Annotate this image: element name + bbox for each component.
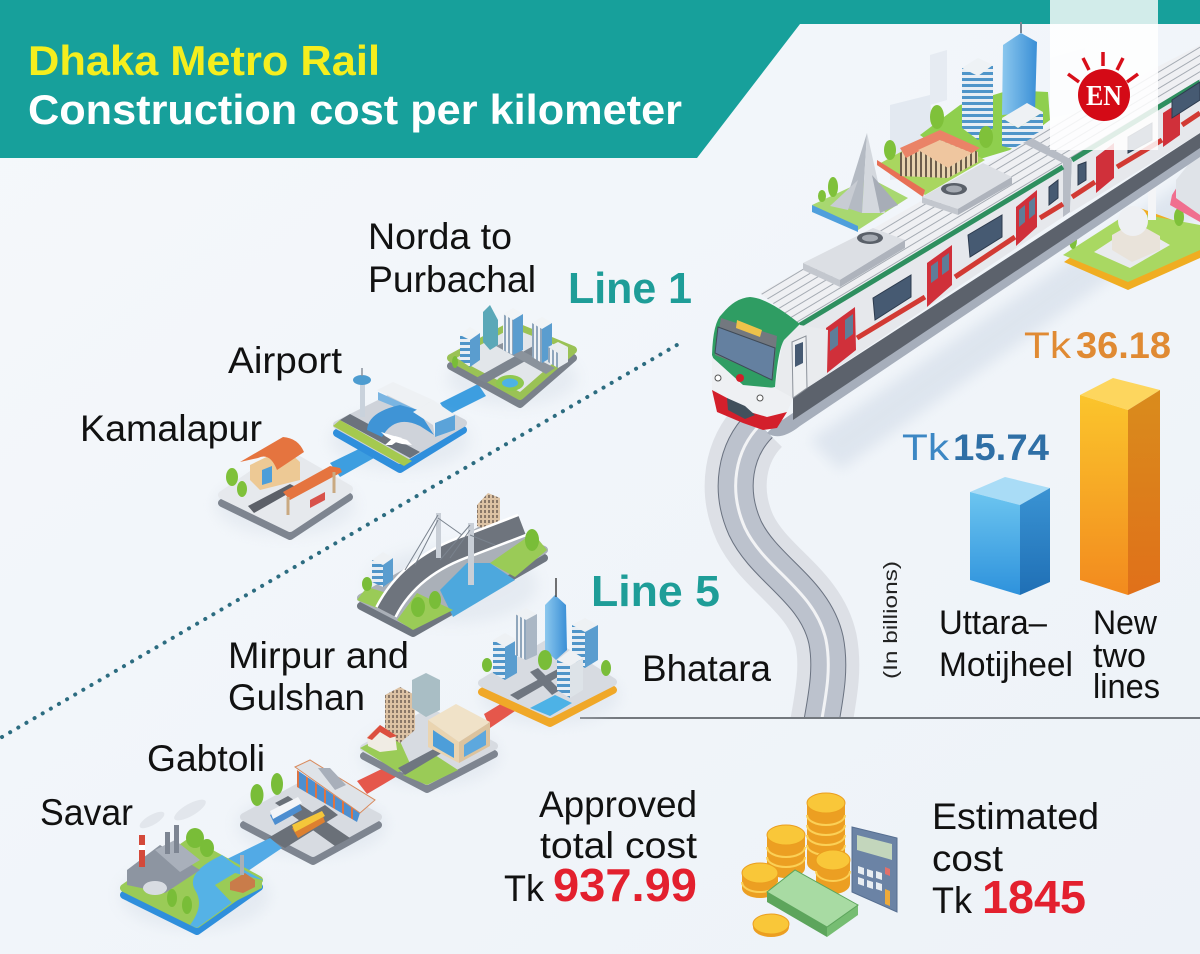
red skirt xyxy=(712,390,787,430)
smoke xyxy=(137,809,167,831)
cash stack xyxy=(767,870,858,937)
station: Kamalapur xyxy=(215,437,355,536)
right coin stack xyxy=(816,850,850,894)
logo disc xyxy=(1078,69,1130,121)
label: Mirpur and Gulshan: Mirpur and xyxy=(228,635,409,676)
middle coin stack xyxy=(767,825,805,878)
bar: New two lines xyxy=(1080,378,1160,595)
chimneys xyxy=(139,835,145,867)
icon: bridge xyxy=(357,493,547,633)
label: Norda to Purbachal xyxy=(368,216,536,300)
label: Mirpur and Gulshan: Gulshan xyxy=(228,677,365,718)
label: Mirpur and Gulshan xyxy=(228,635,409,718)
river xyxy=(190,855,263,928)
connector xyxy=(330,446,374,477)
palace tile xyxy=(877,105,993,197)
label: Savar: Savar xyxy=(40,792,133,833)
tile top xyxy=(337,392,463,460)
tan building xyxy=(477,493,500,530)
cab side window xyxy=(795,342,803,367)
white building behind logo xyxy=(1050,48,1090,118)
front white xyxy=(712,357,793,417)
axis unit: (In billions) xyxy=(881,561,902,679)
tile xyxy=(222,460,349,536)
green left bank xyxy=(357,587,387,608)
factory xyxy=(127,845,200,893)
house xyxy=(250,448,300,490)
destination sign xyxy=(736,320,762,337)
stat: approved total cost: 937.99 xyxy=(553,859,697,911)
water xyxy=(440,563,515,617)
stat: estimated cost xyxy=(932,796,1099,923)
category: Uttara–Motijheel: Motijheel xyxy=(939,646,1073,684)
tile xyxy=(364,720,494,789)
low striped block xyxy=(1002,103,1043,150)
category: New two lines: New xyxy=(1093,604,1157,642)
cab side xyxy=(775,325,828,412)
connector xyxy=(225,838,282,873)
category: New two lines xyxy=(1093,604,1160,706)
base xyxy=(361,532,544,633)
connector xyxy=(440,384,486,415)
header banner xyxy=(0,0,1200,158)
title: Construction cost per kilometer xyxy=(28,86,682,133)
stat: approved total cost: total cost xyxy=(540,825,698,866)
station: Airport xyxy=(330,368,470,477)
bar chart: cost per km xyxy=(881,325,1171,706)
stat: approved total cost xyxy=(504,784,698,911)
head emblem xyxy=(736,374,744,382)
monument tile xyxy=(812,133,908,232)
station: Mirpur and Gulshan xyxy=(357,673,500,794)
side door of cab xyxy=(792,336,807,398)
front coupler xyxy=(727,398,755,419)
house xyxy=(367,725,397,752)
value: 15.74 xyxy=(902,427,1049,468)
value: 36.18 xyxy=(1024,325,1171,366)
connector xyxy=(484,697,518,728)
cab frame xyxy=(715,318,777,378)
illustration: city landmarks behind train xyxy=(812,22,1200,290)
tile base xyxy=(337,397,463,469)
stat: approved total cost: Approved xyxy=(539,784,697,825)
calculator xyxy=(852,827,897,912)
cab green mask xyxy=(712,297,800,390)
control tower xyxy=(353,368,371,417)
soft shadow under train xyxy=(810,170,1200,470)
airplane xyxy=(381,432,412,445)
trees xyxy=(186,828,204,848)
station: Gabtoli xyxy=(237,760,387,861)
stat: estimated cost: cost xyxy=(932,838,1004,879)
station labels xyxy=(40,216,771,833)
icon: coins, cash and calculator xyxy=(742,793,897,937)
title xyxy=(28,37,682,133)
stat: estimated cost: Estimated xyxy=(932,796,1099,837)
tall coin stack xyxy=(807,793,845,873)
car 1 side xyxy=(793,163,1063,397)
connector xyxy=(357,765,399,794)
horizontal rule xyxy=(580,717,1200,719)
tanks xyxy=(143,881,167,895)
buildings xyxy=(493,633,517,647)
logo text: EN xyxy=(1086,81,1122,112)
car 2 roof xyxy=(1030,45,1200,160)
label: Gabtoli: Gabtoli xyxy=(147,738,265,779)
AC units xyxy=(803,163,1012,287)
windshield xyxy=(715,327,775,380)
category: New two lines: two xyxy=(1093,637,1146,675)
elevated rail under train xyxy=(767,140,1200,436)
dotted divider xyxy=(2,342,682,737)
store xyxy=(428,704,490,742)
stat: estimated cost: Tk xyxy=(932,880,972,921)
green stripes xyxy=(800,167,1063,325)
striped tower xyxy=(962,58,993,140)
pylons xyxy=(436,513,441,558)
mosque tile xyxy=(1063,150,1200,290)
pink temple at edge xyxy=(1170,150,1200,222)
logo rays xyxy=(1068,52,1138,82)
heading: Line 1: Line 1 xyxy=(568,264,692,313)
trees xyxy=(411,597,425,617)
value: 15.74: Tk xyxy=(902,427,950,468)
metro train xyxy=(712,45,1200,430)
towers xyxy=(385,687,415,743)
station roof xyxy=(295,760,375,813)
doors xyxy=(826,102,1180,373)
bar: Uttara–Motijheel xyxy=(970,477,1050,595)
terminal xyxy=(367,382,455,437)
label: Kamalapur: Kamalapur xyxy=(80,408,262,449)
label: Norda to Purbachal: Norda to xyxy=(368,216,512,257)
side windows xyxy=(873,82,1200,320)
undercarriage xyxy=(793,133,1200,420)
tile xyxy=(124,849,259,931)
heading: Line 5: Line 5 xyxy=(591,567,720,616)
stat: approved total cost: Tk xyxy=(504,868,544,909)
value: 36.18: 36.18 xyxy=(1076,325,1171,366)
buses xyxy=(270,800,302,825)
shelter xyxy=(283,466,342,500)
stat: estimated cost: 1845 xyxy=(982,871,1086,923)
ghost buildings xyxy=(890,95,935,180)
car 1 roof xyxy=(760,143,1063,325)
glass tower xyxy=(1002,33,1037,115)
blue building xyxy=(372,552,393,565)
EN logo panel xyxy=(1050,0,1158,150)
label: Bhatara: Bhatara xyxy=(642,648,771,689)
trees xyxy=(250,784,264,806)
trees xyxy=(226,468,238,486)
green bottom bank xyxy=(397,593,453,630)
station: Bhatara xyxy=(480,578,620,728)
label: Norda to Purbachal: Purbachal xyxy=(368,259,536,300)
curved rail track xyxy=(736,425,828,730)
deck xyxy=(386,525,522,612)
station facade xyxy=(297,770,360,822)
tile xyxy=(244,789,378,861)
car 2 side xyxy=(1070,80,1200,213)
station: Savar xyxy=(120,796,282,931)
small hut xyxy=(230,873,255,893)
category: Uttara–Motijheel xyxy=(939,604,1073,684)
door windows xyxy=(830,197,1035,351)
runway road xyxy=(340,414,420,458)
tile xyxy=(482,650,613,723)
small left coin stack xyxy=(742,863,778,898)
value: 36.18: Tk xyxy=(1024,325,1072,366)
category: New two lines: lines xyxy=(1093,668,1160,706)
buildings xyxy=(460,327,480,340)
category: Uttara–Motijheel: Uttara– xyxy=(939,604,1047,642)
label: Airport: Airport xyxy=(228,340,343,381)
title: Dhaka Metro Rail xyxy=(28,37,380,84)
tile xyxy=(451,333,573,404)
connector xyxy=(1023,138,1072,217)
single coin xyxy=(753,914,789,937)
green strip xyxy=(333,420,412,466)
station: Norda to Purbachal xyxy=(440,305,577,415)
green park base xyxy=(920,90,1050,165)
green right bank xyxy=(490,533,547,577)
value: 15.74: 15.74 xyxy=(953,427,1049,468)
red stripes xyxy=(857,113,1200,338)
cables xyxy=(405,515,495,570)
